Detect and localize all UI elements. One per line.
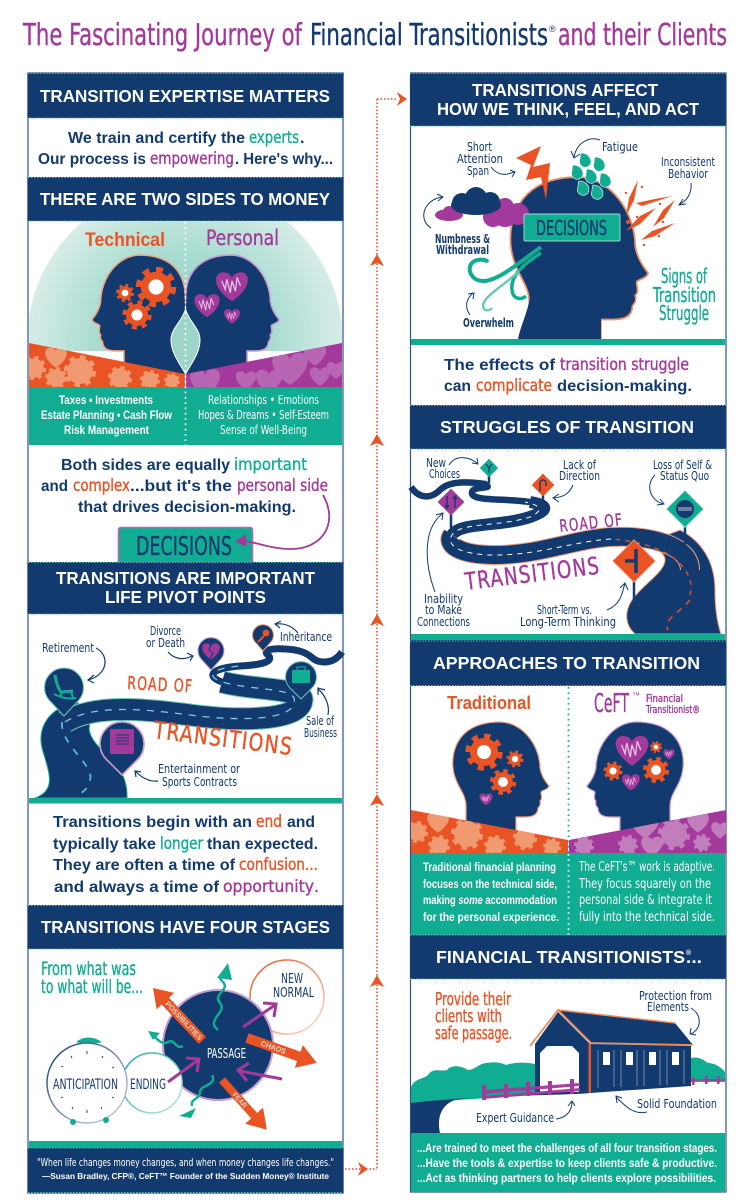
teal summary: ...Act as thinking partners to help clients explore possibilities. <box>417 1173 716 1185</box>
callout: signs of struggle: Transition <box>652 283 716 307</box>
teal explanation: focuses on the technical side, <box>423 879 557 891</box>
wedge: ceft <box>569 810 728 856</box>
callout: safe passage <box>435 989 512 1044</box>
decisions box: DECISIONS <box>136 532 232 562</box>
text: transitions begin: . <box>314 877 319 897</box>
pin: inheritance key <box>253 625 274 651</box>
text: effects: complicate <box>476 376 552 396</box>
panel: approaches to transition <box>408 640 728 935</box>
labels: struggles: Loss of Self & <box>653 458 712 472</box>
text: both sides <box>41 455 328 516</box>
labels: struggles <box>417 456 712 629</box>
sign: loss of self <box>667 491 703 527</box>
heading: ceft: ™ <box>632 691 640 700</box>
labels: bridge: Expert Guidance <box>476 1111 554 1125</box>
text: both sides: important <box>234 455 307 475</box>
teal lists: Relationships • Emotions <box>208 392 319 407</box>
pin: contracts <box>100 722 144 775</box>
labels: road stops: Sports Contracts <box>162 775 237 789</box>
panel: transitions affect <box>410 73 726 396</box>
teal lists: Risk Management <box>64 423 149 437</box>
title: Financial Transitionists <box>310 18 548 53</box>
text: effects <box>444 355 692 396</box>
text: transitions begin: than expected. <box>207 836 318 853</box>
labels: bridge: Elements <box>647 1000 689 1014</box>
arrows: road labels <box>88 621 328 781</box>
arrow: into left end <box>358 1162 368 1176</box>
panel: transition expertise matters: empowering <box>150 149 234 169</box>
teal summary <box>411 1133 725 1192</box>
icon: decisions sign <box>524 214 620 241</box>
labels: signs: Fatigue <box>602 140 638 154</box>
panel: transition expertise matters: . Here's why... <box>235 151 333 168</box>
teal explanation <box>411 853 725 935</box>
panel: financial transitionists: ® <box>686 949 692 957</box>
road label: TRANSITIONS <box>151 716 295 761</box>
panel: transition expertise matters: experts <box>249 128 299 148</box>
labels: struggles: Short-Term vs. <box>537 603 592 617</box>
wedge: personal <box>186 343 342 387</box>
panel: transition expertise matters <box>28 73 344 169</box>
text: transitions begin: confusion... <box>239 855 318 875</box>
callout: signs of struggle <box>652 264 716 325</box>
label: new normal: NORMAL <box>273 986 314 1001</box>
road map <box>411 482 721 634</box>
arrow: fear <box>213 1072 276 1138</box>
teal explanation: for the personal experience. <box>423 912 559 924</box>
icon: clouds <box>435 187 529 227</box>
arrow to decisions <box>237 495 329 549</box>
heading: ceft: Transitionist® <box>645 703 700 716</box>
subhead: From what was <box>41 958 136 980</box>
labels: struggles: Long-Term Thinking <box>520 615 616 629</box>
heading: ceft: CeFT <box>594 689 629 719</box>
flow line: dotted connector with arrows <box>345 92 407 1176</box>
labels: signs: Numbness & <box>435 232 490 246</box>
callout: signs of struggle: Struggle <box>659 301 709 325</box>
labels: bridge: Protection from <box>639 989 712 1003</box>
teal summary: ...Have the tools & expertise to keep clients safe & productive. <box>417 1158 717 1170</box>
panel: transition expertise matters: . <box>300 130 304 147</box>
pin: retirement <box>45 668 83 716</box>
heading: ceft: Financial <box>646 692 683 705</box>
labels: struggles: Lack of <box>563 458 597 472</box>
panel: life pivot points: LIFE PIVOT POINTS <box>105 587 266 607</box>
panel: transition expertise matters: TRANSITION EXPERTISE MATTERS <box>40 86 330 106</box>
heading: personal: Personal <box>206 226 279 250</box>
arrow: possibilities <box>144 980 211 1049</box>
panel: four stages: TRANSITIONS HAVE FOUR STAGES <box>41 917 330 937</box>
hillside road <box>411 1088 592 1133</box>
left head with gears <box>453 722 549 832</box>
panel: right column <box>408 73 728 1192</box>
labels: road stops: Sale of <box>306 714 335 728</box>
text: both sides: and <box>41 478 68 495</box>
arrow: fear: FEAR <box>231 1092 248 1110</box>
heading: technical: Technical <box>85 230 165 251</box>
wedge: technical <box>24 343 185 389</box>
teal lists: Estate Planning • Cash Flow <box>41 408 173 422</box>
panel: four stages <box>28 905 344 1193</box>
labels: road stops: Business <box>304 726 337 740</box>
heading: traditional: Traditional <box>447 693 531 713</box>
arrows: purple movement <box>168 1003 282 1082</box>
panel: two sides to money <box>24 177 345 562</box>
wedge: traditional <box>408 810 568 855</box>
panel: financial transitionists: ... <box>686 947 702 967</box>
teal explanation: making some accommodation <box>423 895 557 907</box>
teal lists: Taxes • Investments <box>59 393 153 407</box>
callout: safe passage: safe passage. <box>435 1023 512 1044</box>
sign: inability <box>438 489 464 515</box>
icon: lightning <box>516 146 550 200</box>
road of transitions map <box>35 649 342 798</box>
labels: road stops: Inheritance <box>280 630 332 644</box>
text: transitions begin: and always a time of <box>54 879 220 896</box>
road label: ROAD OF <box>127 673 194 697</box>
panel: quote <box>28 1148 344 1193</box>
icon: wind swirls <box>470 247 541 310</box>
pin: divorce or death <box>198 638 224 670</box>
title <box>22 18 727 53</box>
text: transitions begin: and <box>287 814 315 831</box>
panel: financial transitionists: FINANCIAL TRANSITIONISTS <box>436 947 685 967</box>
right head with hearts <box>186 255 279 376</box>
subhead: to what will be... <box>41 976 143 998</box>
labels: struggles: Choices <box>429 467 460 481</box>
text: effects: transition struggle <box>560 355 689 375</box>
teal explanation: They focus squarely on the <box>578 876 711 892</box>
panel: two sides to money: THERE ARE TWO SIDES TO MONEY <box>40 189 330 209</box>
labels: road stops: Retirement <box>42 641 94 655</box>
labels: struggles: Status Quo <box>660 469 709 483</box>
labels: signs: Attention <box>457 152 503 166</box>
text: effects: decision-making. <box>557 378 692 395</box>
arrow: upward markers <box>370 254 384 987</box>
text: transitions begin: end <box>256 812 282 832</box>
labels: struggles: Connections <box>417 615 470 629</box>
panel: transitions affect: TRANSITIONS AFFECT <box>472 80 658 100</box>
stage: ending <box>122 1053 182 1113</box>
title: ® <box>549 24 556 34</box>
labels: signs: Withdrawal <box>436 243 489 257</box>
subhead <box>41 958 143 998</box>
fence <box>482 1076 725 1100</box>
text: transitions begin: opportunity <box>223 877 314 897</box>
labels: signs <box>435 140 715 330</box>
arrows: teal squiggles <box>148 963 232 1118</box>
labels: road stops <box>42 624 337 789</box>
panel: approaches to transition: APPROACHES TO TRANSITION <box>433 653 700 673</box>
text: both sides: complex <box>73 476 130 496</box>
teal explanation: personal side & integrate it <box>579 892 712 908</box>
road label: TRANSITIONS <box>462 552 602 596</box>
labels: signs: Inconsistent <box>661 155 715 169</box>
arrow: possibilities: POSSIBILITIES <box>163 999 204 1042</box>
label: passage: PASSAGE <box>207 1047 246 1062</box>
panel: quote: —Susan Bradley, CFP®, CeFT™ Founder of the Sudden Money® Institute <box>42 1171 329 1181</box>
panel: transition expertise matters: Our process is <box>38 151 146 168</box>
covered bridge <box>530 1010 693 1093</box>
stage: anticipation clock <box>47 1038 127 1125</box>
labels: road stops: Entertainment or <box>158 762 240 776</box>
teal explanation: fully into the technical side. <box>579 909 715 925</box>
signs <box>438 459 703 600</box>
arrow: chaos <box>243 1027 321 1074</box>
arrows: signs <box>424 139 691 315</box>
arrow: chaos: CHAOS <box>260 1039 287 1056</box>
stage: anticipation clock: ANTICIPATION <box>53 1077 118 1093</box>
text: transitions begin: They are often a time of <box>53 857 236 874</box>
label: ending: ENDING <box>130 1077 166 1093</box>
sign: new choices <box>480 459 498 477</box>
icon: fatigue drops <box>571 153 611 199</box>
panel: financial transitionists <box>410 935 726 1192</box>
labels: struggles: to Make <box>425 603 462 617</box>
labels: signs: Overwhelm <box>463 316 514 330</box>
arrows: struggles <box>427 458 664 610</box>
labels: signs: Behavior <box>668 167 708 181</box>
teal lists: Sense of Well-Being <box>220 422 307 437</box>
labels: bridge <box>476 989 717 1125</box>
right head with hearts <box>587 722 683 832</box>
text: transitions begin: longer <box>160 834 204 854</box>
labels: road stops: or Death <box>146 636 185 650</box>
pin: sale of business <box>286 662 316 699</box>
callout: signs of struggle: Signs of <box>661 264 707 288</box>
text: transitions begin <box>53 812 319 897</box>
teal lists: Hopes & Dreams • Self-Esteem <box>198 407 329 422</box>
road label: ROAD OF <box>558 510 624 537</box>
big head <box>510 177 648 342</box>
label: new normal <box>273 972 314 1001</box>
callout: safe passage: clients with <box>435 1006 502 1027</box>
stage: new normal <box>250 960 324 1034</box>
panel: transition expertise matters: We train and certify the <box>68 130 245 147</box>
labels: struggles: Inability <box>424 592 464 606</box>
stage: passage circle <box>163 990 273 1100</box>
callout: safe passage: Provide their <box>435 989 511 1010</box>
panel: quote: "When life changes money changes, and when money changes life changes." <box>37 1157 334 1169</box>
teal explanation: Traditional financial planning <box>423 862 556 874</box>
text: both sides: Both sides are equally <box>61 457 230 474</box>
text: transitions begin: Transitions begin with an <box>53 814 252 831</box>
icon: inconsistent shards <box>625 180 675 246</box>
text: effects: can <box>444 378 471 395</box>
labels: signs: Short <box>467 140 492 154</box>
labels: signs: Span <box>467 164 489 178</box>
labels: road stops: Divorce <box>150 624 181 638</box>
text: both sides: personal side <box>237 476 328 496</box>
teal lists <box>29 387 342 445</box>
arrows: bridge <box>556 1008 699 1119</box>
panel: struggles of transition <box>410 405 726 640</box>
road label <box>462 510 624 596</box>
leaf between heads <box>171 309 200 374</box>
panel: life pivot points <box>28 562 344 897</box>
left head with gears <box>92 255 185 376</box>
panel: struggles of transition: STRUGGLES OF TRANSITION <box>440 417 694 437</box>
text: both sides: that drives decision-making. <box>78 499 296 516</box>
labels: struggles: New <box>426 456 446 470</box>
heading: ceft <box>594 689 700 719</box>
labels: bridge: Solid Foundation <box>637 1097 717 1111</box>
arrow: into right column <box>397 92 407 106</box>
icon: decisions sign: DECISIONS <box>536 216 607 240</box>
sign: direction <box>532 474 554 496</box>
labels: struggles: Direction <box>559 469 600 483</box>
text: both sides: ...but it's the <box>130 478 232 495</box>
panel: life pivot points: TRANSITIONS ARE IMPORTANT <box>56 568 315 588</box>
sign: short vs long <box>613 540 655 582</box>
trees <box>411 1057 725 1103</box>
text: transitions begin: typically take <box>53 836 156 853</box>
road label <box>127 673 295 761</box>
title: The Fascinating Journey of <box>22 18 303 53</box>
panel: transitions affect: HOW WE THINK, FEEL, AND ACT <box>437 99 699 119</box>
text: effects: The effects of <box>444 357 556 374</box>
halo behind heads <box>29 221 342 351</box>
label: new normal: NEW <box>281 972 303 987</box>
